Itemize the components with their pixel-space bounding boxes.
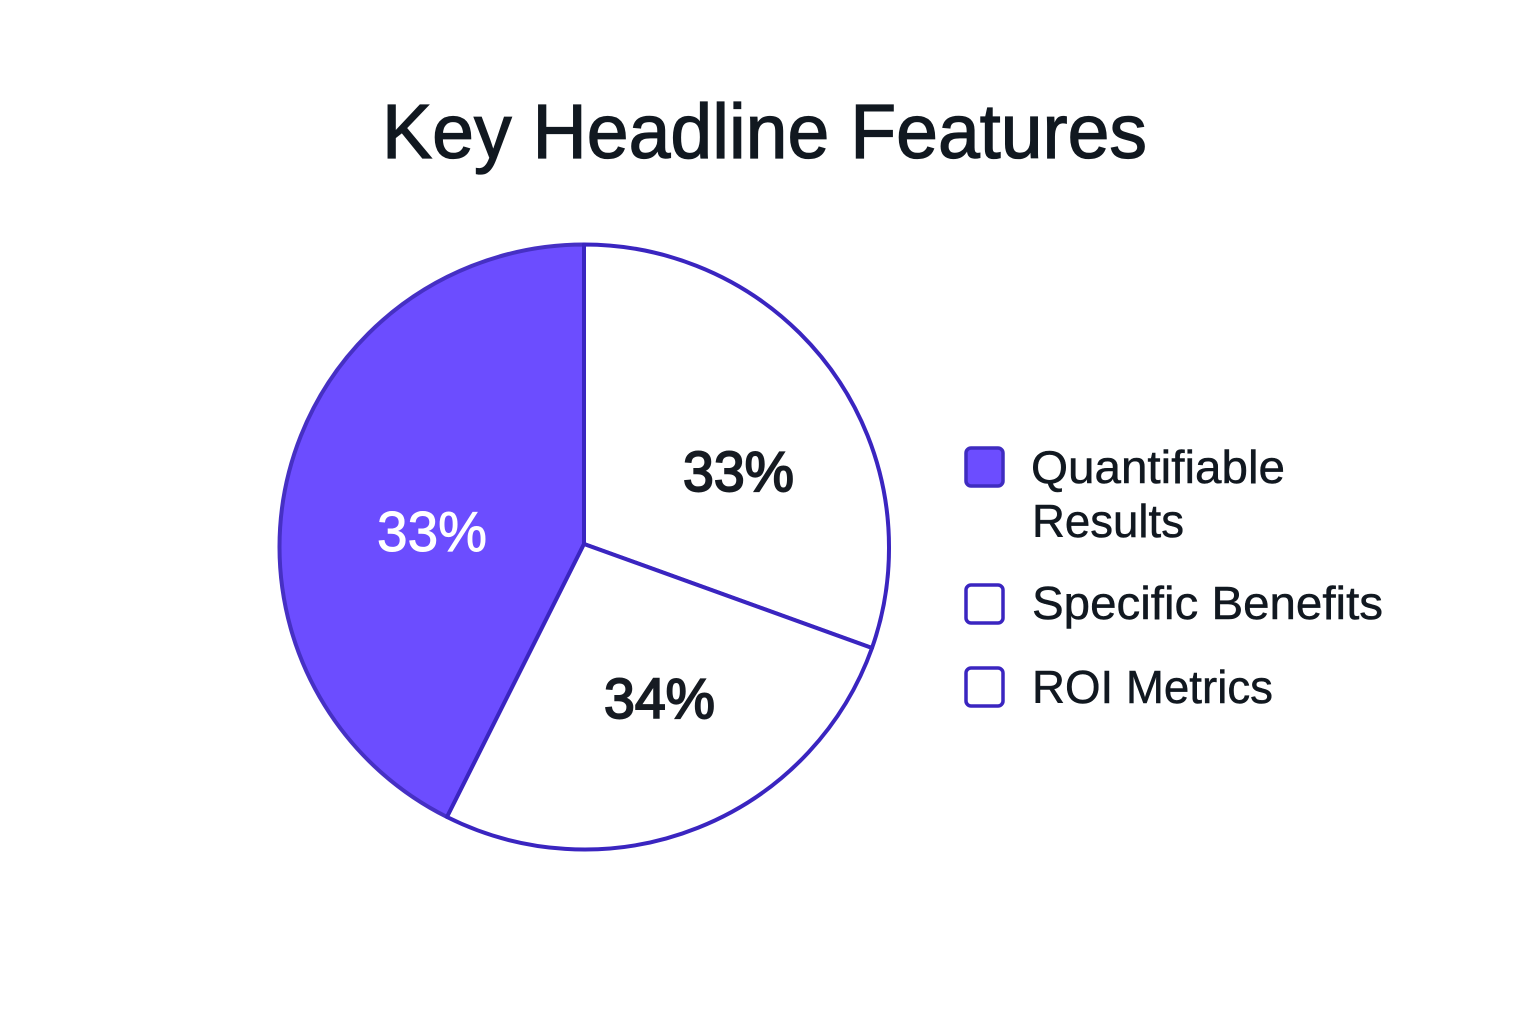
legend swatch: ROI metrics (966, 668, 1003, 706)
title: Key Headline Features (382, 89, 1147, 175)
legend swatch: quantifiable results (966, 448, 1003, 486)
slice: quantifiable results (280, 244, 584, 817)
legend label: quantifiable results: Quantifiable (1031, 441, 1285, 493)
legend label: quantifiable results: Results (1032, 495, 1184, 547)
legend (966, 441, 1383, 713)
legend swatch: specific benefits (966, 585, 1003, 623)
slice: specific benefits (584, 244, 889, 648)
legend label: specific benefits: Specific Benefits (1032, 577, 1383, 629)
label: 34% dark: 34% (604, 667, 715, 731)
label: 33% white: 33% (377, 500, 487, 564)
pie chart (280, 244, 889, 849)
legend label: ROI metrics: ROI Metrics (1032, 661, 1273, 713)
label: 33% dark: 33% (683, 440, 794, 504)
slice: ROI metrics (447, 544, 872, 849)
